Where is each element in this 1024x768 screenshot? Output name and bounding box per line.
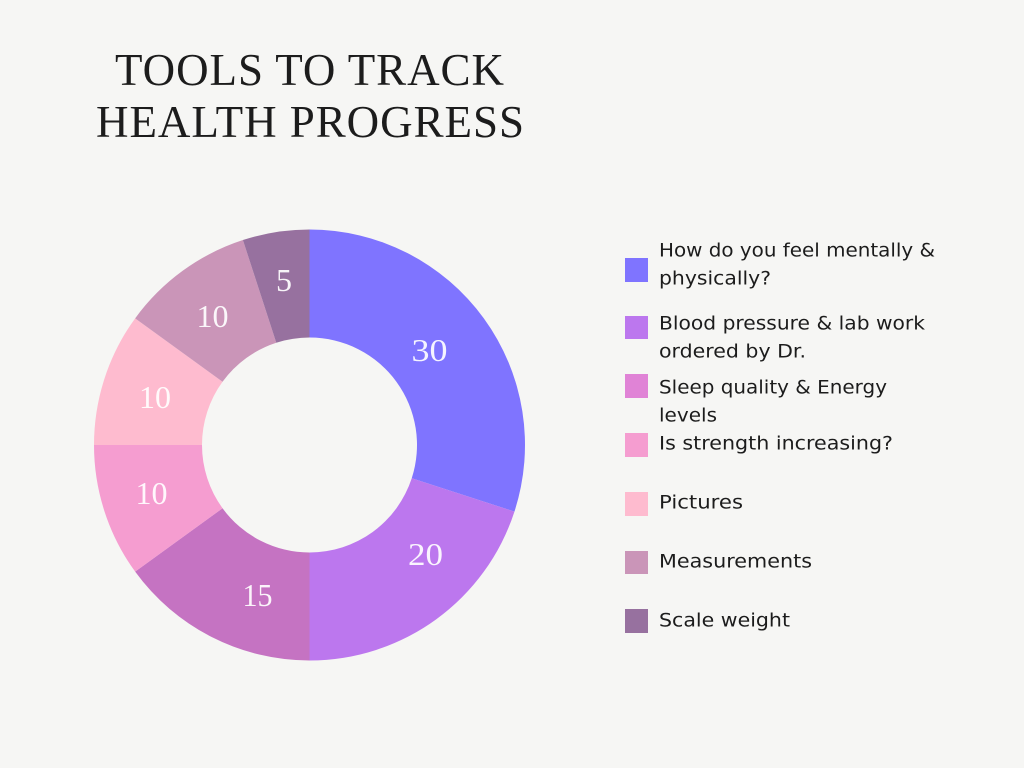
legend item: blood pressure: ordered by Dr. bbox=[659, 340, 806, 362]
value labels: 10 bbox=[196, 298, 228, 334]
slice: 10 pictures bbox=[94, 318, 223, 445]
legend item: mental and physical: How do you feel mentally & bbox=[659, 240, 935, 262]
legend item: pictures: Pictures bbox=[659, 492, 743, 514]
legend item: sleep: Sleep quality & Energy bbox=[659, 376, 887, 398]
value labels: 30 bbox=[412, 332, 448, 368]
legend bbox=[625, 240, 935, 633]
slice: 5 bbox=[243, 230, 310, 343]
legend item: blood pressure bbox=[625, 312, 925, 362]
donut chart bbox=[94, 230, 525, 660]
legend item: scale weight bbox=[625, 609, 790, 633]
slice: 20 bbox=[310, 478, 514, 660]
slice: 10 strength bbox=[94, 445, 223, 572]
legend item: scale weight: Scale weight bbox=[659, 610, 790, 632]
value labels: 10 bbox=[139, 379, 171, 415]
legend item: sleep bbox=[625, 374, 887, 426]
legend item: blood pressure: Blood pressure & lab work bbox=[659, 312, 925, 334]
legend item: sleep: levels bbox=[659, 404, 717, 426]
value labels: 5 bbox=[276, 262, 292, 298]
value labels: 10 bbox=[136, 475, 168, 511]
title: HEALTH PROGRESS bbox=[96, 97, 524, 147]
legend item: pictures bbox=[625, 492, 743, 516]
slice: 15 bbox=[135, 508, 310, 660]
slice: 10 measurements bbox=[135, 240, 276, 382]
value labels: 20 bbox=[408, 536, 443, 572]
legend item: mental and physical: physically? bbox=[659, 268, 771, 290]
title bbox=[96, 45, 524, 147]
legend item: mental and physical bbox=[625, 240, 935, 290]
slice: 30 bbox=[310, 230, 525, 512]
legend item: strength: Is strength increasing? bbox=[659, 432, 893, 454]
value labels: 15 bbox=[242, 577, 272, 613]
title: TOOLS TO TRACK bbox=[115, 45, 504, 95]
value labels bbox=[136, 262, 448, 613]
legend item: measurements: Measurements bbox=[659, 550, 812, 572]
